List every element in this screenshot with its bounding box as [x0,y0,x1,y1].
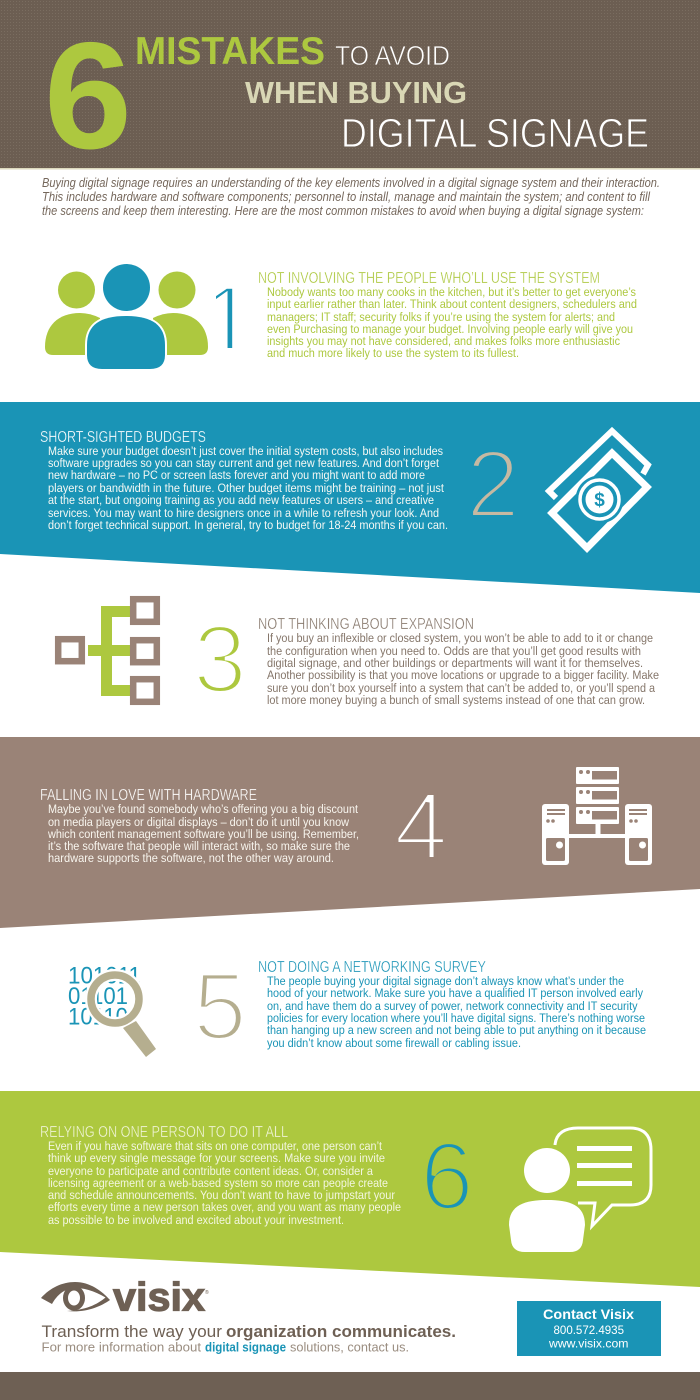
section 3 text [258,616,659,707]
title: to avoid: TO AVOID [335,40,450,71]
body 3: digital signage, and other buildings or departments will want it for themselves. [267,656,643,670]
icon: magnifier over binary: 01101 [68,983,128,1010]
icon: expansion tree [58,599,157,702]
heading 4: FALLING IN LOVE WITH HARDWARE [40,787,257,804]
body 2: at the start, but ongoing training as you add new features or users – and creative [48,493,434,507]
title: digital signage: DIGITAL SIGNAGE [341,110,649,156]
body 2: players or bandwidth in the future. Other budget items might be training – not just [48,481,445,495]
body 4: Maybe you’ve found somebody who’s offering you a big discount [48,802,359,816]
icon: person with speech bubble [509,1128,651,1252]
body 1: even Purchasing to manage your budget. Involving people early will give you [267,322,633,336]
body 5: policies for every location where you’ll have digital signs. There’s nothing worse [267,1011,645,1025]
body 2: Make sure your budget doesn’t just cover the initial system costs, but also includes [48,444,443,458]
body 6: efforts every time a new person takes over, and you want as many people [48,1200,401,1214]
body 2: services. You may want to hire designers once in a while to refresh your look. And [48,506,439,520]
footer bar [0,1372,700,1400]
contact box: 800.572.4935 [554,1323,624,1337]
icon: money: $ [594,490,605,511]
contact box: www.visix.com [548,1336,628,1350]
body 2 [48,444,448,532]
body 5: you didn’t know about some firewall or cabling issue. [267,1036,521,1050]
panel: relying on one person [0,1091,700,1287]
body 1: and much more likely to use the system to its fullest. [267,346,519,360]
body 3: Another possibility is that you move locations or upgrade to a bigger facility. Make [267,668,659,682]
body 5 [267,974,646,1050]
body 6 [48,1139,401,1227]
body 1 [267,285,637,360]
numeral 5: 5 [193,953,247,1060]
body 3 [267,631,659,707]
contact prompt: solutions, contact us. [290,1340,409,1354]
body 3: If you buy an inflexible or closed system, you won’t be able to add to it or change [267,631,653,645]
section 5 text [258,959,646,1050]
icon: servers [542,767,652,865]
body 1: input earlier rather than later. Think about content designers, schedulers and [267,297,637,311]
heading 5: NOT DOING A NETWORKING SURVEY [258,959,486,976]
body 3: sure you don’t box yourself into a system that can’t be added to, or you’ll spend a [267,681,655,695]
section 1 text [258,270,637,360]
big numeral 6: 6 [44,11,132,181]
body 1: managers; IT staff; security folks if you’re using the system for alerts; and [267,310,615,324]
body 2: software upgrades so you can stay current and get new features. And don’t forget [48,456,440,470]
heading 3: NOT THINKING ABOUT EXPANSION [258,616,474,633]
body 4: it’s the software that people will interact with, so make sure the [48,839,350,853]
body 4: which content management software you’ll be using. Remember, [47,827,359,841]
icon: people group [45,264,208,369]
body 5: The people buying your digital signage don’t always know what’s under the [267,974,624,988]
tagline: organization communicates. [226,1323,456,1341]
title: when buying: WHEN BUYING [245,75,467,110]
heading 2: SHORT-SIGHTED BUDGETS [40,429,206,446]
heading 1: NOT INVOLVING THE PEOPLE WHO’LL USE THE SYSTEM [258,270,600,287]
panel: falling in love with hardware [0,737,700,928]
numeral 1: 1 [199,265,257,381]
body 1: insights you may not have considered, and makes folks more enthusiastic [267,334,620,348]
numeral 4: 4 [394,773,448,880]
body 5: hood of your network. Make sure you have a qualified IT person involved early [267,986,644,1000]
body 4: hardware supports the software, not the other way around. [48,851,334,865]
body 2: new hardware – no PC or screen lasts forever and you might want to add more [48,468,425,482]
tagline [42,1323,456,1341]
contact prompt [42,1340,409,1354]
panel: short-sighted budgets [0,402,700,593]
body 1: Nobody wants too many cooks in the kitchen, but it’s better to get everyone’s [267,285,636,299]
body 3: the configuration when you need to. Odds are that you’ll get good results with [267,644,641,658]
icon: magnifier over binary: 10110 [68,1004,128,1030]
numeral 3: 3 [193,606,247,713]
body 6: everyone to participate and contribute content ideas. Or, consider a [48,1164,373,1178]
body 6: licensing agreement or a web-based system so more can people create [48,1176,388,1190]
intro paragraph [42,175,660,218]
body 6: think up every single message for your screens. Make sure you invite [48,1151,385,1165]
body 5: on, and have them do a survey of power, network connectivity and IT security [267,999,638,1013]
tagline: Transform the way your [42,1323,223,1341]
footer logo: visix: ® [205,1289,209,1296]
footer logo: visix [41,1276,209,1320]
icon: money [549,431,648,548]
header banner [0,0,700,181]
numeral 2: 2 [466,431,520,538]
contact box: Contact Visix [543,1306,634,1322]
contact prompt: For more information about [42,1340,202,1354]
body 2: don’t forget technical support. In general, try to budget for 18-24 months if you can. [48,518,448,532]
body 6: Even if you have software that sits on one computer, one person can’t [48,1139,383,1153]
icon: magnifier over binary: 101011 [68,962,141,990]
contact box [517,1301,661,1356]
body 6: as possible to be involved and excited about your investment. [48,1213,344,1227]
icon: magnifier over binary [68,962,156,1057]
body 3: lot more money buying a bunch of small systems instead of one that can grow. [267,693,645,707]
footer logo: visix: visix [113,1276,205,1320]
title: mistakes: MISTAKES [135,30,325,73]
contact prompt: digital signage [205,1340,286,1354]
body 5: than hanging up a new screen and not being able to put anything on it because [267,1023,646,1037]
body 4 [47,802,359,865]
heading 6: RELYING ON ONE PERSON TO DO IT ALL [40,1124,288,1141]
body 6: and schedule announcements. You don’t want to have to jumpstart your [48,1188,395,1202]
numeral 6: 6 [420,1123,474,1230]
body 4: on media players or digital displays – don’t do it until you know [48,815,349,829]
